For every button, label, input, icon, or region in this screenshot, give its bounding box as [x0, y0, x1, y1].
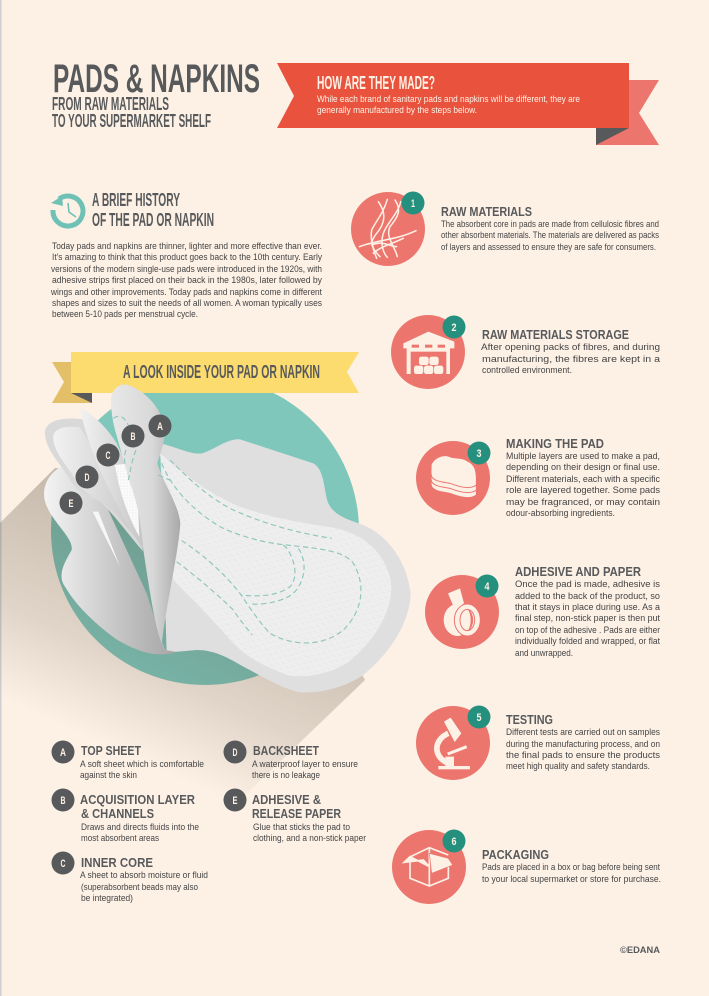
legend C	[52, 852, 208, 903]
heading: brief history: OF THE PAD OR NAPKIN	[92, 210, 214, 230]
text: adhesive and paper	[515, 565, 661, 658]
legend A: A	[60, 747, 66, 759]
step 6: packaging	[392, 830, 661, 904]
text: adhesive and paper: ADHESIVE AND PAPER	[515, 565, 641, 579]
text: adhesive and paper: individually folded and wrapped, or flat	[515, 636, 660, 646]
text: history body: shapes and sizes to suit the needs of all women. A woman typically uses	[52, 298, 322, 308]
text: packaging: Pads are placed in a box or bag before being sent	[482, 862, 660, 872]
layer E: adhesive	[44, 466, 177, 654]
icon: warehouse: 2	[452, 322, 456, 334]
step 3: making the pad	[416, 437, 661, 518]
legend C: be integrated)	[81, 893, 133, 903]
text: history body: between 5-10 pads per menstrual cycle.	[52, 309, 198, 319]
icon: layers	[416, 441, 490, 515]
icon: layers: 3	[476, 448, 482, 460]
text: raw materials	[441, 205, 659, 252]
text: testing: Different tests are carried out on samples	[506, 727, 660, 737]
text: making the pad	[506, 437, 661, 518]
legend C: INNER CORE	[81, 856, 153, 870]
banner: a look inside: A LOOK INSIDE YOUR PAD OR NAPKIN	[123, 362, 320, 382]
pad marker C	[96, 444, 120, 466]
banner: how are they made	[277, 63, 659, 145]
panel: brief history	[50, 190, 322, 319]
text: making the pad: depending on their design or final use.	[506, 462, 660, 472]
text: making the pad: role are layered together. Some pads	[506, 485, 661, 495]
stitching	[113, 416, 361, 643]
heading: brief history	[92, 190, 214, 230]
text: testing: TESTING	[506, 713, 553, 727]
illustration: pad with markers	[44, 384, 411, 692]
icon: tape	[425, 574, 499, 649]
legend D: A waterproof layer to ensure	[252, 759, 358, 769]
text: making the pad: MAKING THE PAD	[506, 437, 604, 451]
text: storage: RAW MATERIALS STORAGE	[482, 328, 629, 342]
legend B: most absorbent areas	[81, 833, 159, 843]
icon: box: 6	[452, 836, 456, 848]
legend D: D	[232, 747, 238, 759]
legend A	[52, 740, 204, 780]
pad drawing	[44, 384, 411, 692]
banner: how are they made: HOW ARE THEY MADE?	[317, 73, 435, 93]
text: testing: meet high quality and safety standards.	[506, 761, 650, 771]
legend C: A sheet to absorb moisture or fluid	[80, 870, 208, 880]
legend D	[224, 740, 358, 780]
step 1: raw materials	[351, 192, 659, 266]
step 2: storage	[391, 315, 660, 389]
icon: clock	[51, 196, 83, 226]
credit: ©EDANA	[620, 945, 661, 955]
step 4: adhesive and paper	[425, 565, 661, 658]
text: raw materials: other absorbent materials. The materials are delivered as packs	[441, 230, 659, 240]
pad marker D: D	[84, 472, 90, 484]
text: storage: manufacturing, the fibres are kept in a	[482, 354, 660, 364]
banner: a look inside	[52, 352, 359, 403]
pad marker A	[148, 414, 172, 438]
text: making the pad: Different materials, each with a specific	[506, 474, 660, 484]
text: testing	[506, 713, 661, 771]
text: packaging: PACKAGING	[482, 848, 549, 862]
text: raw materials: RAW MATERIALS	[441, 205, 532, 219]
layer D: backsheet	[45, 419, 143, 552]
legend B: ACQUISITION LAYER	[80, 793, 195, 807]
icon: fibres	[351, 192, 425, 266]
legend E	[224, 788, 366, 843]
legend	[52, 740, 366, 903]
text: storage	[481, 328, 660, 375]
text: packaging: to your local supermarket or store for purchase.	[482, 874, 661, 884]
text: making the pad: odour-absorbing ingredients.	[506, 508, 615, 518]
icon: warehouse	[391, 315, 466, 389]
title: TO YOUR SUPERMARKET SHELF	[52, 111, 211, 131]
legend B: B	[60, 795, 66, 807]
legend D: there is no leakage	[252, 770, 320, 780]
text: raw materials: The absorbent core in pads are made from cellulosic fibres and	[441, 219, 659, 229]
icon: microscope: 5	[476, 712, 482, 724]
teal circle with long shadow	[0, 377, 365, 800]
layer C: inner core	[80, 408, 143, 550]
text: adhesive and paper: and unwrapped.	[515, 648, 573, 658]
legend A: against the skin	[80, 770, 137, 780]
legend A: TOP SHEET	[81, 744, 141, 758]
text: history body: wings and other improvements. Today pads and napkins come in different	[50, 287, 322, 297]
title: PADS & NAPKINS	[53, 57, 260, 101]
heading: brief history: A BRIEF HISTORY	[92, 190, 180, 210]
text: testing: the final pads to ensure the products	[506, 750, 661, 760]
layer A: top sheet	[111, 384, 180, 652]
legend C: C	[60, 858, 66, 870]
text: storage: controlled environment.	[482, 365, 572, 375]
title	[52, 57, 260, 131]
legend B	[52, 788, 199, 843]
icon: microscope	[416, 706, 490, 780]
legend B: & CHANNELS	[81, 807, 154, 821]
text: storage: After opening packs of fibres, and during	[481, 342, 660, 352]
text: adhesive and paper: added to the back of the product, so	[515, 591, 660, 601]
text: history body: It's amazing to think that this product goes back to the 10th century. Early	[52, 252, 322, 262]
pad marker C: C	[106, 450, 111, 462]
text: history body: Today pads and napkins are thinner, lighter and more effective than ever.	[52, 241, 322, 251]
pad marker E: E	[68, 498, 74, 510]
legend E: Glue that sticks the pad to	[253, 822, 350, 832]
text: making the pad: Multiple layers are used to make a pad,	[506, 451, 660, 461]
text: raw materials: of layers and assessed to ensure they are safe for consumers.	[441, 242, 656, 252]
legend B: Draws and directs fluids into the	[81, 822, 199, 832]
text: history body: versions of the modern single-use pads were introduced in the 1920s, with	[51, 264, 322, 274]
pad marker B: B	[130, 431, 136, 443]
banner: how are they made: While each brand of sanitary pads and napkins will be different, they are	[317, 94, 580, 104]
text: adhesive and paper: on top of the adhesive . Pads are either	[515, 625, 660, 635]
legend E: RELEASE PAPER	[252, 807, 341, 821]
pad marker B	[122, 424, 144, 448]
pad marker A: A	[157, 421, 163, 433]
icon: tape: 4	[484, 581, 490, 593]
legend E: E	[232, 795, 238, 807]
text: testing: during the manufacturing process, and on	[506, 739, 660, 749]
pad marker D	[76, 466, 98, 488]
icon: box	[392, 830, 466, 904]
text: adhesive and paper: that it stays in place during use. As a	[515, 602, 660, 612]
text: history body	[50, 241, 322, 319]
legend E: clothing, and a non-stick paper	[253, 833, 366, 843]
pad marker E	[60, 492, 82, 514]
text: history body: adhesive strips first placed on their back in the 1980s, later followed by	[52, 275, 322, 285]
banner: how are they made: generally manufactured by the steps below.	[317, 105, 477, 115]
step 5: testing	[416, 706, 661, 780]
icon: fibres: 1	[411, 198, 415, 210]
legend A: A soft sheet which is comfortable	[80, 759, 204, 769]
text: making the pad: may be fragranced, or may contain	[506, 497, 660, 507]
legend C: (superabsorbent beads may also	[81, 882, 198, 892]
text: adhesive and paper: Once the pad is made, adhesive is	[515, 579, 661, 589]
title: FROM RAW MATERIALS	[52, 94, 169, 114]
text: adhesive and paper: final step, non-stick paper is then put	[515, 613, 660, 623]
legend D: BACKSHEET	[253, 744, 319, 758]
text: packaging	[482, 848, 661, 884]
legend E: ADHESIVE &	[252, 793, 321, 807]
